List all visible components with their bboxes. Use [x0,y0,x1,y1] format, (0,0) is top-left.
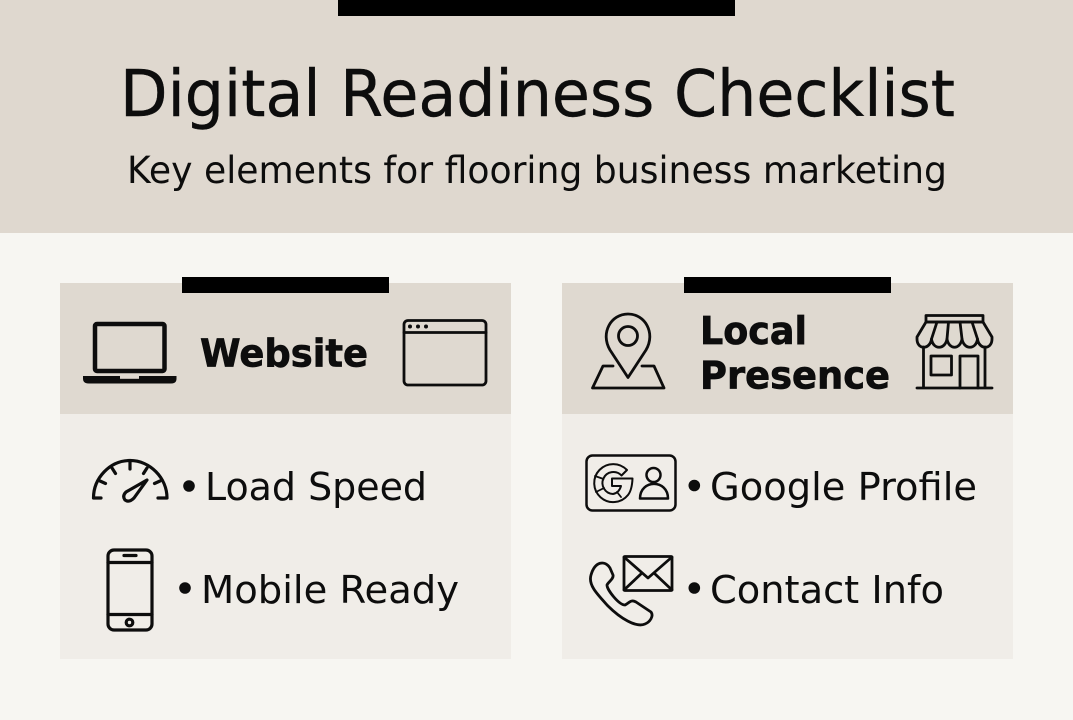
panel: local presence [562,277,1013,659]
title: Digital Readiness Checklist [120,58,955,132]
item: contact info: Contact Info [710,568,944,612]
icon: smartphone [108,550,152,630]
panel: website [60,277,511,659]
header banner [0,0,1073,233]
heading: website: Website [200,332,368,376]
heading: local presence: Local [700,309,807,353]
item: google profile: Google Profile [710,465,977,509]
icon: phone and envelope [590,556,672,625]
icon: speedometer [94,460,167,501]
icon: map pin [592,314,664,388]
item: mobile ready: Mobile Ready [201,568,459,612]
heading: local presence: Presence [700,354,890,398]
icon: browser window [404,320,486,385]
icon: google profile card [586,456,676,510]
icon: storefront [917,316,992,388]
subtitle: Key elements for flooring business marketing [127,149,947,192]
item: load speed: Load Speed [205,465,427,509]
heading: local presence [700,309,890,398]
icon: laptop [83,324,176,384]
